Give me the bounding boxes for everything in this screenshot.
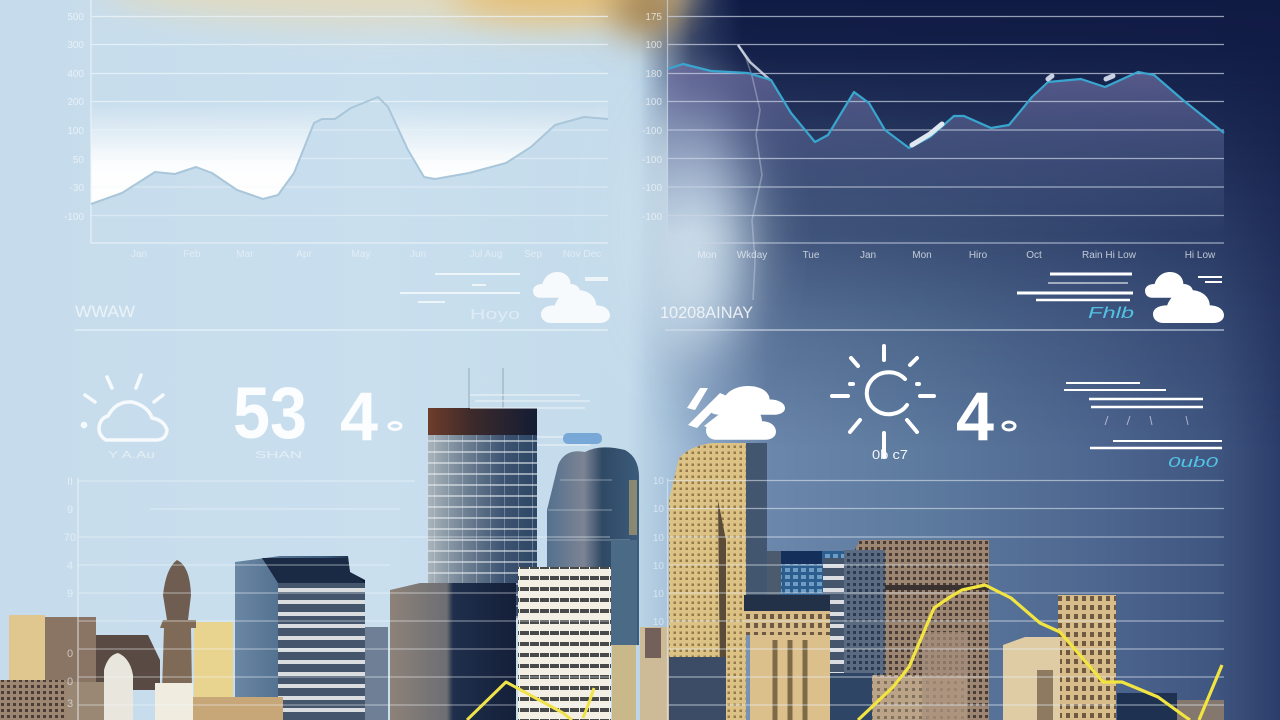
x axis labels: Jun xyxy=(410,249,426,260)
degree mark xyxy=(1003,422,1015,430)
y axis labels: -100 xyxy=(642,212,662,223)
left chart axis labels: 0 xyxy=(67,676,73,688)
white fill above curve xyxy=(91,97,608,204)
data lines xyxy=(1017,274,1222,300)
data lines xyxy=(470,395,600,445)
y axis labels: -30 xyxy=(70,183,84,194)
left chart axis labels: 3 xyxy=(67,698,73,710)
right chart axis labels: 10 xyxy=(653,504,664,515)
icon: clouds xyxy=(533,272,610,323)
y axis labels: 100 xyxy=(67,126,84,137)
x axis labels: Apr xyxy=(296,249,312,260)
weather row: right xyxy=(687,346,1222,471)
left chart axis labels: 9 xyxy=(67,504,73,516)
tan block xyxy=(9,615,160,690)
panel: right summary row xyxy=(660,272,1224,330)
y axis labels: 100 xyxy=(645,97,662,108)
left chart axis labels: II xyxy=(67,476,73,488)
left chart gridlines xyxy=(78,478,610,720)
yellow line xyxy=(467,682,572,720)
summary label: 10208AINAY xyxy=(660,303,753,322)
right chart axis labels: 10 xyxy=(653,617,664,628)
dark base block xyxy=(669,657,726,720)
right chart axis labels: 10 xyxy=(653,589,664,600)
x axis labels: Jan xyxy=(131,249,147,260)
rounded tower xyxy=(547,447,639,645)
data lines with rain xyxy=(1064,383,1222,448)
right edge glass xyxy=(611,540,637,645)
dark office block xyxy=(390,583,516,720)
gridlines xyxy=(668,0,1224,243)
x axis labels: Feb xyxy=(183,249,201,260)
panel: top-right area chart xyxy=(642,0,1224,300)
icon: clouds xyxy=(1145,272,1224,323)
panel: left summary row xyxy=(75,272,610,330)
degree mark xyxy=(389,422,401,430)
y axis labels: 175 xyxy=(645,12,662,23)
icon: sun behind cloud outline xyxy=(82,375,167,440)
cyan value: Fhlb xyxy=(1088,305,1134,322)
far-left low buildings xyxy=(640,627,670,720)
big number 4: 4 xyxy=(340,378,378,455)
city skyline: left xyxy=(0,368,639,720)
left chart axis labels: 9 xyxy=(67,588,73,600)
left chart axis labels xyxy=(64,476,76,710)
x axis labels: Tue xyxy=(803,250,820,261)
x axis labels: Jul Aug xyxy=(470,249,502,260)
big brown building xyxy=(844,540,989,720)
weather row: left xyxy=(82,373,602,461)
y axis labels: 300 xyxy=(67,40,84,51)
gold tower xyxy=(669,443,746,720)
x axis labels: Oct xyxy=(1026,250,1042,261)
blue windows block xyxy=(767,551,844,708)
cyan value: 0ub0 xyxy=(1168,454,1219,471)
city skyline: right xyxy=(640,443,1224,720)
x axis labels: Nov Dec xyxy=(563,249,601,260)
blue indicator xyxy=(563,433,602,444)
low navy block xyxy=(1117,693,1224,720)
y axis labels: -100 xyxy=(642,126,662,137)
x axis labels: Hi Low xyxy=(1185,250,1216,261)
left chart axis labels: 70 xyxy=(64,532,76,544)
y axis labels: 400 xyxy=(67,69,84,80)
tall tower xyxy=(428,368,537,618)
small grey building xyxy=(365,627,388,720)
low buildings xyxy=(0,653,283,720)
x axis labels: Wkday xyxy=(737,250,767,261)
icon: sun xyxy=(832,346,934,457)
x axis labels xyxy=(131,249,601,260)
data lines xyxy=(400,274,608,302)
big number 4: 4 xyxy=(956,378,994,455)
summary value: Hoyo xyxy=(470,306,520,323)
x axis labels: Mon xyxy=(912,250,932,261)
right chart axis labels: 10 xyxy=(653,533,664,544)
y axis labels: 50 xyxy=(73,155,84,166)
y axis labels xyxy=(642,12,662,223)
y axis labels: -100 xyxy=(64,212,84,223)
left chart axis labels: 4 xyxy=(67,560,73,572)
left chart axis labels: 0 xyxy=(67,648,73,660)
panel: top-left area chart xyxy=(64,0,608,260)
x axis labels xyxy=(697,250,1216,261)
yellow building xyxy=(194,622,233,702)
area fill xyxy=(668,64,1224,240)
yellow line xyxy=(858,585,1190,720)
y axis labels xyxy=(64,12,84,223)
lightning bolt xyxy=(738,45,762,300)
y axis labels: -100 xyxy=(642,155,662,166)
x axis labels: Jan xyxy=(860,250,876,261)
minaret tower xyxy=(160,560,196,690)
number label: SHAN xyxy=(255,450,302,461)
y axis labels: 180 xyxy=(645,69,662,80)
x axis labels: Mar xyxy=(236,249,254,260)
right tan towers xyxy=(1003,595,1116,720)
area curve xyxy=(91,97,608,204)
x axis labels: Hiro xyxy=(969,250,988,261)
y axis labels: 100 xyxy=(645,40,662,51)
x axis labels: May xyxy=(352,249,370,260)
blue curve xyxy=(668,64,1224,148)
blue office building xyxy=(235,556,365,720)
x axis labels: Rain Hi Low xyxy=(1082,250,1137,261)
curve highlights xyxy=(912,124,942,145)
condition label: Y A.Au xyxy=(108,450,155,461)
y axis labels: 500 xyxy=(67,12,84,23)
y axis labels: 200 xyxy=(67,97,84,108)
summary label: WWAW xyxy=(75,302,135,321)
tan midrise xyxy=(744,595,830,720)
right chart axis labels: 10 xyxy=(653,476,664,487)
dark tower side xyxy=(742,443,767,633)
x axis labels: Mon xyxy=(697,250,717,261)
white striped building xyxy=(518,567,611,720)
y axis labels: -100 xyxy=(642,183,662,194)
right chart axis labels xyxy=(653,476,664,628)
big number 53: 53 xyxy=(233,373,307,454)
right chart axis labels: 10 xyxy=(653,561,664,572)
gridlines xyxy=(91,0,608,243)
x axis labels: Sep xyxy=(524,249,542,260)
sun label: 0b c7 xyxy=(872,447,908,462)
navy filler xyxy=(830,673,872,720)
icon: rain cloud xyxy=(687,386,785,440)
right chart gridlines xyxy=(668,478,1224,720)
